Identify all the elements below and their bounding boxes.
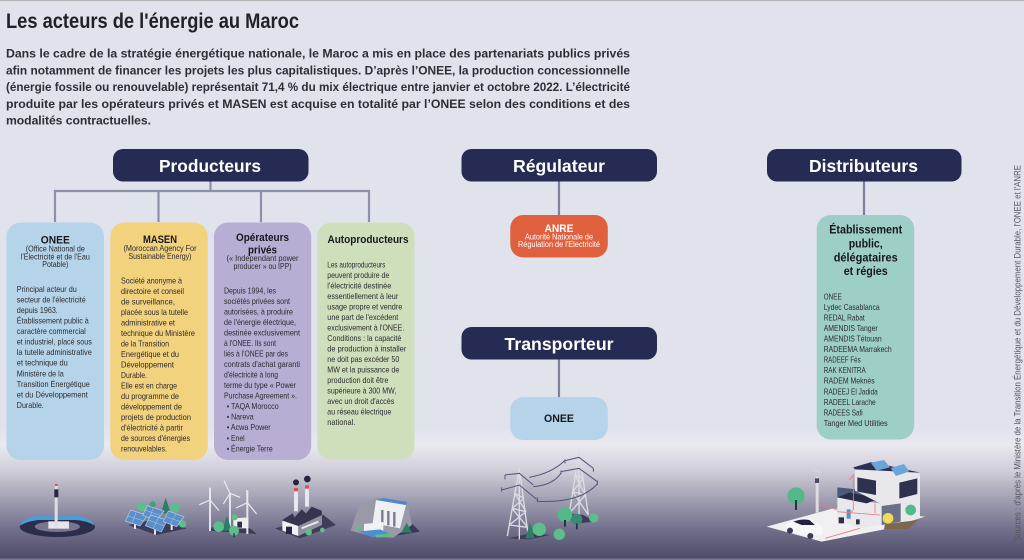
panel: Distributeurs list: RADEEF Fès [824,356,861,365]
panel: ONEE producteur: depuis 1963. [17,306,58,315]
heading: Régulateur: Régulateur [513,156,605,176]
panel: Opérateurs privés: Depuis 1994, les [224,286,276,295]
panel: ONEE producteur [6,222,104,460]
panel: Autoproducteurs: Conditions : la capacité [327,334,402,343]
panel: ONEE producteur: et industriel, placé sous [17,338,92,347]
panel: ONEE producteur: caractère commercial [17,327,86,336]
panel: Opérateurs privés: (« Independant power [226,254,299,263]
intro text block: produite par les opérateurs privés et MASEN est acquise en totalité par l’ONEE selon des conditions et des [6,97,630,111]
panel: Opérateurs privés: de l'énergie électrique, [224,318,296,327]
panel: MASEN: du programme de [121,392,179,401]
panel: Distributeurs list: et régies [844,264,888,278]
title: Les acteurs de l'énergie au Maroc [6,9,299,33]
panel: ONEE producteur: Transition Énergétique [17,380,90,389]
panel: Autoproducteurs [317,222,414,460]
panel: ONEE producteur: Principal acteur du [17,285,77,294]
panel: Autoproducteurs: peuvent produire de [327,271,390,280]
panel: Autoproducteurs: Les autoproducteurs [327,260,385,269]
panel: Autoproducteurs: usage propre et vendre [327,302,403,311]
panel: ANRE [510,215,608,258]
heading: Producteurs [113,149,308,182]
panel: ONEE producteur: et du Développement [17,390,88,399]
panel: Distributeurs list: RADEEL Larache [824,398,876,407]
panel: ANRE: Régulation de l'Electricité [518,240,601,249]
heading: Transporteur [462,327,657,360]
panel: Opérateurs privés: terme du type « Power [224,381,296,390]
panel: Opérateurs privés: liés à l'ONEE par des [224,350,288,358]
panel: Distributeurs list: public, [849,236,883,250]
source note: Sources : d'après le Ministère de la Transition Énergétique et du Développement Durable, l'ONEE et l'ANRE [1012,165,1022,541]
panel: Distributeurs list: RADEES Safi [824,408,863,417]
panel: Opérateurs privés: • TAQA Morocco [227,402,279,411]
panel: MASEN: d'électricité à partir [121,424,183,433]
heading: Distributeurs: Distributeurs [809,156,918,176]
icon: house with electric car [767,460,925,542]
connectors: Producteurs tree [55,181,369,222]
panel: Distributeurs list: REDAL Rabat [824,313,865,322]
intro text block: afin notamment de financer les projets les plus capitalistiques. D’après l’ONEE, la production concessionnelle [6,63,630,77]
panel: Autoproducteurs: de production à installer [327,344,407,354]
panel: Opérateurs privés: sociétés privées sont [224,297,291,306]
panel: MASEN: placée sous la tutelle [121,308,188,317]
panel: MASEN: (Moroccan Agency For [124,244,197,253]
panel: Autoproducteurs: exclusivement à l'ONEE. [327,323,404,332]
panel: MASEN: Développement [121,360,175,370]
intro text block: (énergie fossile ou renouvelable) représentait 71,4 % du mix électrique entre janvier et octobre 2022. L’électricité [6,80,630,94]
panel: Distributeurs list: RAK KENITRA [824,366,866,375]
heading: Distributeurs [767,149,962,182]
panel: Opérateurs privés: Purchase Agreement ». [224,392,297,401]
panel: ONEE producteur: Durable. [17,401,44,410]
panel: Distributeurs list: AMENDIS Tanger [824,324,878,333]
panel: MASEN: directoire et conseil [121,287,184,296]
panel: Opérateurs privés: privés [248,244,277,256]
icon: solar tower [20,484,95,537]
panel: ONEE producteur: Potable) [42,260,69,269]
panel: Distributeurs list [817,215,914,440]
panel: ONEE producteur: l'Electricité et de l'Eau [21,252,90,261]
panel: Opérateurs privés: • Enel [227,434,245,443]
panel: MASEN: développement de [121,402,182,412]
panel: Opérateurs privés: contrats d'achat garanti [224,360,300,369]
panel: Opérateurs privés: d'électricité à long [224,371,278,380]
heading: Producteurs: Producteurs [159,156,261,176]
panel: ONEE producteur: (Office National de [26,244,85,254]
intro text block: Dans le cadre de la stratégie énergétique nationale, le Maroc a mis en place des partenariats publics privés [6,46,630,60]
panel: Distributeurs list: RADEM Meknès [824,377,875,386]
panel: MASEN: MASEN [143,234,177,246]
panel: ANRE: ANRE [544,223,574,235]
panel: Distributeurs list: délégataires [834,250,898,264]
panel: MASEN: renouvelables. [121,445,167,454]
panel: MASEN [110,222,208,460]
panel: ONEE producteur: et technique du [17,359,68,368]
icon: thermal power plant [275,476,336,538]
panel: Autoproducteurs: supérieure à 300 MW, [327,387,396,396]
panel: ONEE producteur: la tutelle administrative [17,348,92,357]
panel: MASEN: technique du Ministère [121,329,195,338]
icon: solar panels [125,498,187,535]
panel: MASEN: Sustainable Energy) [128,252,192,261]
panel: ONEE producteur: Ministère de la [17,369,64,378]
panel: Opérateurs privés: destinée exclusivement [224,328,301,337]
panel: Distributeurs list: RADEEJ El Jadida [824,387,878,396]
panel: ONEE transporteur: ONEE [544,413,574,425]
heading: Transporteur: Transporteur [504,334,614,354]
panel: ONEE producteur: Établissement public à [17,317,89,326]
panel: Distributeurs list: Tanger Med Utilities [824,419,888,428]
panel: Autoproducteurs: une part de l'excédent [327,313,399,322]
panel: Autoproducteurs: essentiellement à leur [327,292,399,301]
panel: Opérateurs privés: autorisées, à produire [224,307,293,316]
icon: electricity pylons [502,452,598,540]
panel: Autoproducteurs: au réseau électrique [327,408,392,417]
panel: Distributeurs list: RADEEMA Marrakech [824,345,892,354]
panel: MASEN: Elle est en charge [121,382,177,390]
panel: Opérateurs privés: • Acwa Power [227,423,271,432]
panel: Autoproducteurs: MW et la puissance de [327,366,400,374]
panel: Opérateurs privés: • Nareva [227,413,254,422]
panel: Opérateurs privés: • Énergie Terre [227,444,273,453]
panel: MASEN: Energétique et du [121,350,179,359]
panel: ANRE: Autorité Nationale de [525,232,594,242]
panel: Autoproducteurs: avec un droit d'accès [327,397,394,406]
panel: MASEN: administrative et [121,318,176,327]
panel: ONEE producteur: secteur de l'électricité [17,296,86,304]
panel: ONEE transporteur [510,397,608,440]
icon: wind turbines [199,481,257,537]
heading: Régulateur [462,149,657,182]
panel: Distributeurs list: ONEE [824,292,842,301]
icon: hydroelectric dam [351,497,420,538]
panel: Autoproducteurs: ne doit pas excéder 50 [327,355,400,364]
panel: Autoproducteurs: Autoproducteurs [328,234,408,246]
intro text block [6,46,630,128]
panel: Autoproducteurs: national. [327,418,355,427]
panel: Opérateurs privés: Opérateurs [236,232,289,244]
panel: MASEN: de surveillance, [121,297,175,306]
connectors: Régulateur, Transporteur, Distributeurs [559,181,864,397]
intro text block: modalités contractuelles. [6,114,151,128]
panel: Distributeurs list: AMENDIS Tétouan [824,334,882,344]
panel: MASEN: projets de production [121,413,191,422]
panel: Distributeurs list: Établissement [829,222,902,236]
panel: Opérateurs privés: à l'ONEE. Ils sont [224,339,277,348]
panel: Autoproducteurs: production doit être [327,376,389,385]
panel: MASEN: Société anonyme à [121,276,182,285]
panel: MASEN: de sources d'énergies [121,434,190,443]
panel: Distributeurs list: Lydec Casablanca [824,303,880,312]
panel: ONEE producteur: ONEE [41,234,70,246]
panel: Autoproducteurs: l'électricité destinée [327,281,392,290]
panel: MASEN: de la Transition [121,339,169,348]
panel: Opérateurs privés [214,222,311,460]
panel: MASEN: Durable. [121,371,147,380]
panel: Opérateurs privés: producer » ou IPP) [234,262,292,271]
